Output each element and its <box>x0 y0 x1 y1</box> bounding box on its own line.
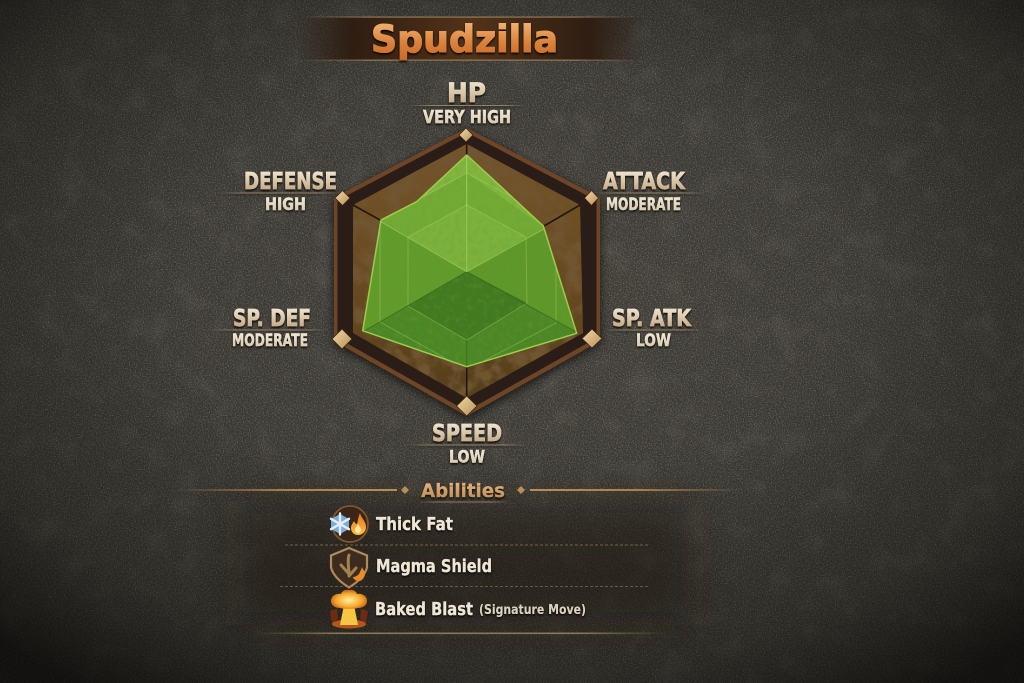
label: HP <box>408 78 526 128</box>
label: Speed: SPEED <box>432 421 502 447</box>
label: Defense <box>218 169 340 215</box>
bottom rule <box>255 632 665 634</box>
ability row: Thick Fat: Thick Fat <box>376 514 453 535</box>
hexagonal frame <box>334 128 600 416</box>
label: Defense: DEFENSE <box>244 169 337 195</box>
label: Speed: LOW <box>449 448 485 468</box>
title banner <box>296 16 646 61</box>
vertex diamonds <box>332 128 602 416</box>
abilities heading: Abilities <box>421 480 505 502</box>
label: Attack: MODERATE <box>606 195 681 215</box>
icon: snowflake and flame <box>331 506 368 542</box>
green stat polygon <box>362 154 578 368</box>
label: Defense: HIGH <box>265 195 306 215</box>
label: Sp. Atk: SP. ATK <box>612 306 692 332</box>
label: Attack <box>595 169 707 215</box>
label: Sp. Atk: LOW <box>636 331 671 351</box>
label: Sp. Def: MODERATE <box>232 331 308 351</box>
title text: Spudzilla <box>371 18 558 61</box>
divider <box>280 586 650 588</box>
ability row: Baked Blast <box>330 590 586 628</box>
label: Sp. Atk <box>604 306 704 351</box>
label: HP: VERY HIGH <box>423 107 511 128</box>
ability row: Baked Blast: (Signature Move) <box>479 603 586 618</box>
inner plate <box>353 142 583 397</box>
divider <box>285 544 650 546</box>
label: Sp. Def <box>210 306 330 351</box>
label: HP: HP <box>447 78 486 109</box>
ability row: Magma Shield <box>331 548 492 588</box>
icon: shield <box>331 548 367 588</box>
radar chart <box>332 128 602 416</box>
abilities heading <box>175 480 745 502</box>
label: Speed <box>405 421 529 468</box>
label: Sp. Def: SP. DEF <box>233 306 311 332</box>
icon: explosion <box>330 590 368 628</box>
ability row: Baked Blast: Baked Blast <box>375 599 473 620</box>
ability row: Thick Fat <box>331 506 453 542</box>
ability row: Magma Shield: Magma Shield <box>376 556 492 577</box>
label: Attack: ATTACK <box>603 169 686 195</box>
